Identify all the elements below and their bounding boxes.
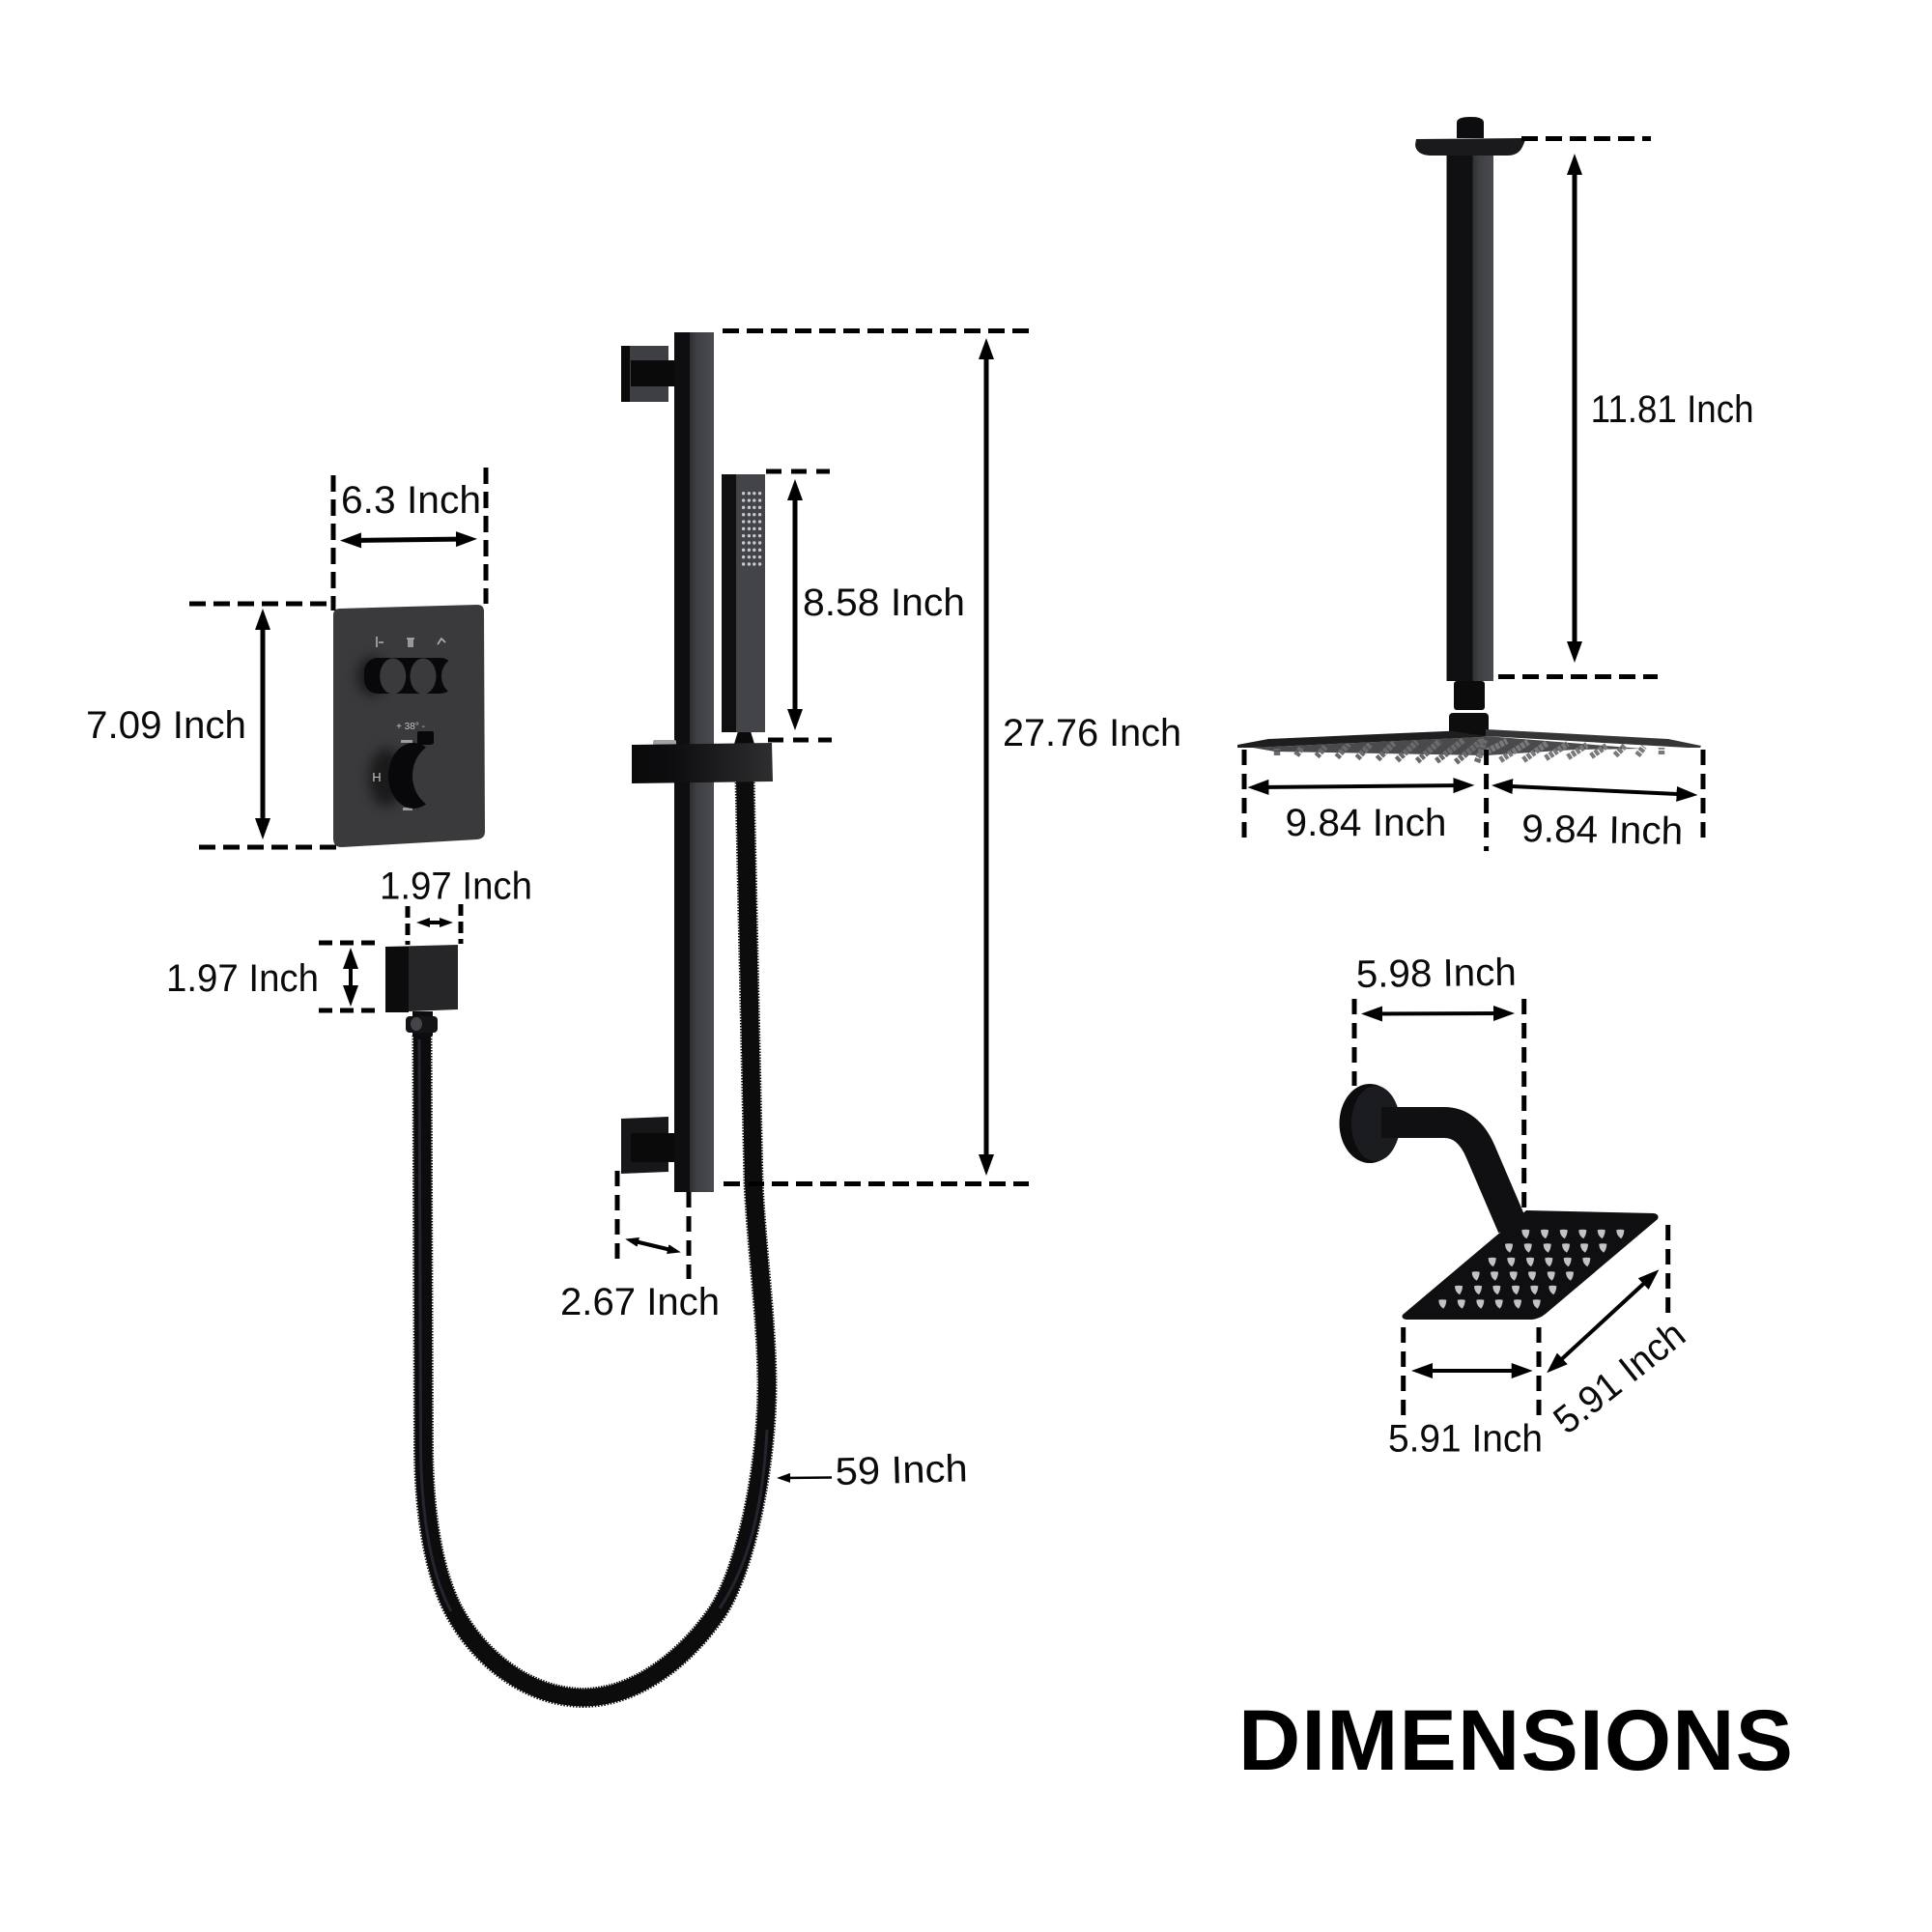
hand shower nozzles [744,494,760,566]
panel: thermostatic valve [333,605,485,847]
function knobs [357,657,472,696]
bottom wall bracket [621,1117,674,1174]
dimension: slide bar length [723,330,1181,1184]
dimension: ceiling arm length [1498,139,1754,676]
dimension: hand shower length: 8.58 Inch [803,582,965,624]
valve plate [333,605,485,847]
outlet nut [406,1011,438,1036]
dimension: outlet height: 1.97 Inch [166,957,319,1000]
dimension: bar depth [560,1171,720,1323]
dimension: head depth [1546,1225,1693,1442]
panel: ceiling rain shower [1237,117,1701,762]
dimension: hand shower length [766,471,965,740]
arm coupling [1449,681,1489,736]
panel: slide bar [621,332,773,1192]
dimension: rain head width left: 9.84 Inch [1285,802,1447,844]
function icons [377,637,445,647]
outlet block [385,945,458,1012]
dimension: hose length: 59 Inch [835,1447,968,1493]
dimension: valve height [86,604,336,847]
panel: wall-mount shower [1339,1084,1658,1320]
slider button [653,740,676,748]
dimension: rain head width left [1244,750,1487,851]
dimension: arm reach: 5.98 Inch [1356,952,1517,996]
dimension: rain head width right [1501,750,1703,853]
ceiling flange [1415,138,1525,156]
temperature dial: H [372,770,382,784]
rain head plate [1237,729,1701,748]
dimension: outlet width: 1.97 Inch [380,866,532,908]
ceiling stub [1457,117,1484,138]
rain head nozzles [1277,739,1662,762]
dimension: valve height: 7.09 Inch [86,704,246,747]
hand shower [722,474,765,732]
shower arm [1381,1122,1513,1227]
hose holder stub [734,731,754,744]
dimension: valve width [333,468,486,611]
slider block [632,743,773,783]
shower head nozzles [1438,1230,1624,1309]
top wall bracket [621,346,674,402]
dimension: outlet height [166,943,383,1010]
panel: wall outlet [385,945,458,1036]
dimension: head width [1388,1327,1543,1461]
shower head [1403,1210,1658,1320]
ceiling arm [1447,151,1493,681]
dimension: outlet width [380,866,532,945]
dimension: valve width: 6.3 Inch [341,479,481,522]
dimension: bar depth: 2.67 Inch [560,1281,720,1323]
bar [674,332,714,1192]
temperature dial: + 38° - [396,722,425,732]
dimension: slide bar length: 27.76 Inch [1003,712,1181,754]
title: DIMENSIONS [1238,1691,1793,1788]
wall flange [1339,1084,1401,1163]
dimension: ceiling arm length: 11.81 Inch [1591,388,1754,431]
rain head underside [1253,736,1642,755]
dimension: head depth: 5.91 Inch [1546,1313,1693,1442]
dimension: rain head width right: 9.84 Inch [1521,808,1684,853]
hand shower hose [419,779,767,1698]
dimension: head width: 5.91 Inch [1388,1418,1543,1461]
dimension: arm reach [1354,952,1524,1209]
temperature dial [369,722,470,810]
